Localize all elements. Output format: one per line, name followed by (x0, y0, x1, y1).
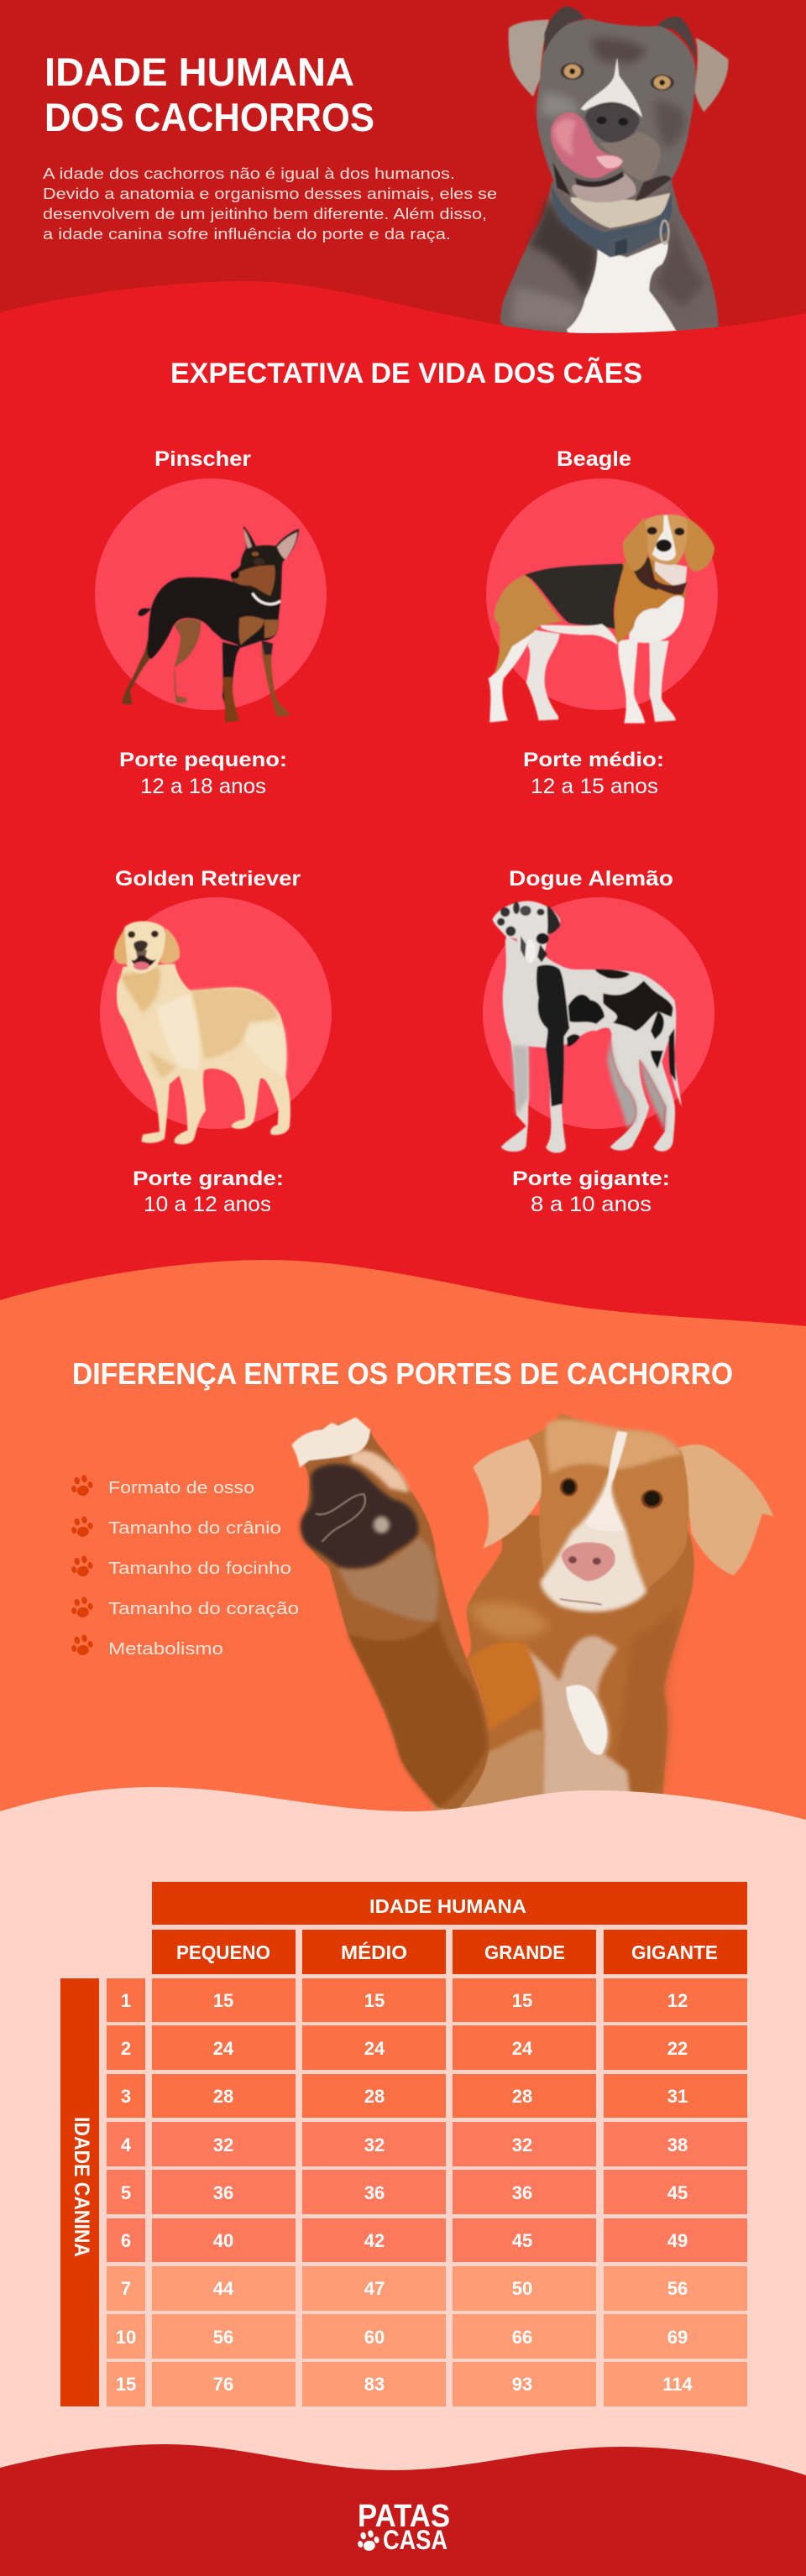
lifespan: medio: 12 a 15 anos (531, 775, 658, 798)
table row: 2: 24 (512, 2038, 533, 2059)
table row: 2: 24 (213, 2038, 234, 2059)
table: idade humana x idade canina (60, 1882, 747, 2406)
circle: golden (100, 897, 332, 1129)
icon: paw 3 (69, 1554, 95, 1578)
list item 3: Tamanho do focinho (108, 1560, 291, 1578)
panel: dogue alemao (483, 867, 714, 1216)
heading: diferenca entre os portes: DIFERENÇA ENTRE OS PORTES DE CACHORRO (72, 1356, 733, 1391)
table row: 15: 93 (512, 2374, 532, 2395)
table header: portes (152, 1930, 747, 1974)
table row: 5: 5 (121, 2182, 131, 2203)
hero intro text: A idade dos cachorros não é igual à dos humanos. (43, 165, 455, 182)
size label: gigante: Porte gigante: (512, 1168, 670, 1190)
list item 1: Formato de osso (108, 1479, 254, 1497)
table row: 2: 2 (121, 2038, 131, 2059)
table row: 6: 45 (512, 2230, 532, 2251)
breed name: golden: Golden Retriever (115, 867, 301, 891)
panel: pinscher (95, 447, 327, 798)
logo: patas da casa (355, 2499, 450, 2555)
icon: paw 2 (69, 1515, 95, 1539)
hero title (44, 50, 374, 139)
table row: 1: 15 (364, 1990, 385, 2011)
size label: grande: Porte grande: (133, 1168, 284, 1190)
icon: golden retriever dog (114, 921, 290, 1144)
hero intro text (43, 165, 497, 243)
table row: 6: 40 (213, 2230, 233, 2251)
hero title: IDADE HUMANA (44, 50, 354, 94)
table row: 5 (107, 2170, 747, 2214)
table row: 7 (107, 2266, 747, 2311)
table header: portes: MÉDIO (341, 1941, 407, 1963)
panel: golden retriever (100, 867, 332, 1216)
table row: 2: 24 (364, 2038, 385, 2059)
size label: pequeno: Porte pequeno: (119, 749, 287, 771)
panel: bright red section background (0, 281, 806, 1343)
table row: 10: 66 (512, 2327, 532, 2348)
table row: 6 (107, 2218, 747, 2262)
icon: paw 5 (69, 1633, 95, 1657)
panel: peach section background (0, 1787, 806, 2518)
table row: 1: 1 (121, 1990, 131, 2011)
table row: 7: 50 (512, 2278, 532, 2299)
table row: 2 (107, 2025, 747, 2070)
table row: 3: 31 (667, 2086, 688, 2107)
lifespan: pequeno: 12 a 18 anos (140, 775, 266, 798)
icon: paw 4 (69, 1596, 95, 1619)
breed name: pinscher: Pinscher (154, 447, 251, 471)
list item 2: Tamanho do crânio (108, 1519, 281, 1538)
breed name: dogue: Dogue Alemão (509, 867, 673, 891)
table header: portes: GRANDE (484, 1941, 565, 1963)
table row: 5: 36 (213, 2182, 233, 2203)
logo: patas da casa: PATAS (358, 2499, 450, 2534)
table header: idade humana (152, 1882, 747, 1925)
table row: 15 (107, 2362, 747, 2406)
table row: 15: 83 (364, 2374, 385, 2395)
background: hero dark red (0, 0, 806, 353)
table row: 4: 4 (121, 2134, 132, 2155)
table row: 3 (107, 2074, 747, 2118)
list item 4: Tamanho do coração (108, 1600, 299, 1618)
table row: 10 (107, 2314, 747, 2359)
icon: beagle dog (489, 515, 714, 724)
circle: beagle (486, 478, 718, 710)
hero intro text: a idade canina sofre influência do porte e da raça. (43, 225, 451, 243)
table row: 6: 6 (121, 2230, 131, 2251)
table row: 1 (107, 1978, 747, 2022)
hero intro text: desenvolvem de um jeitinho bem diferente. Além disso, (43, 205, 487, 222)
table row: 4: 32 (512, 2134, 532, 2155)
table row: 3: 28 (512, 2086, 532, 2107)
panel: footer (0, 2444, 806, 2576)
panel: beagle (486, 447, 718, 798)
table header: idade humana: IDADE HUMANA (369, 1895, 526, 1917)
table row: 15: 15 (116, 2374, 136, 2395)
table row: 4: 38 (667, 2134, 688, 2155)
table row: 1: 15 (213, 1990, 233, 2011)
table row: 6: 42 (364, 2230, 385, 2251)
table row: 6: 49 (667, 2230, 688, 2251)
size label: medio: Porte médio: (523, 749, 664, 771)
table header: portes: PEQUENO (176, 1941, 270, 1963)
icon: great dane dog (493, 901, 682, 1153)
circle: pinscher (95, 478, 327, 710)
icon: pinscher dog (122, 526, 299, 723)
table row: 7: 56 (667, 2278, 688, 2299)
icon: dog raising paw (291, 1413, 773, 1816)
logo: patas da casa: CASA (383, 2525, 447, 2555)
table row: 5: 36 (364, 2182, 385, 2203)
table row: 10: 10 (116, 2327, 136, 2348)
dog neck base (623, 556, 687, 609)
table row: 3: 28 (213, 2086, 233, 2107)
table row: 7: 47 (364, 2278, 385, 2299)
side header: idade canina: IDADE CANINA (70, 2117, 93, 2257)
bullet list: diferencas (69, 1474, 299, 1659)
table row: 10: 69 (667, 2327, 688, 2348)
panel: orange section background (0, 1260, 806, 1847)
table header: portes: GIGANTE (631, 1941, 718, 1963)
icon: hero pitbull dog (500, 6, 728, 338)
table row: 7: 7 (121, 2278, 131, 2299)
lifespan: grande: 10 a 12 anos (144, 1193, 271, 1216)
side header: idade canina (60, 1978, 99, 2406)
table row: 15: 76 (213, 2374, 233, 2395)
table row: 4: 32 (213, 2134, 233, 2155)
hero title: DOS CACHORROS (44, 95, 374, 139)
table row: 3: 28 (364, 2086, 385, 2107)
lifespan: gigante: 8 a 10 anos (531, 1193, 652, 1216)
table row: 4: 32 (364, 2134, 385, 2155)
table row: 1: 15 (512, 1990, 532, 2011)
table row: 4 (107, 2122, 747, 2166)
table row: 10: 56 (213, 2327, 233, 2348)
list item 5: Metabolismo (108, 1640, 223, 1659)
table row: 10: 60 (364, 2327, 385, 2348)
table row: 15: 114 (662, 2374, 693, 2395)
heading: expectativa de vida: EXPECTATIVA DE VIDA DOS CÃES (170, 358, 642, 389)
table row: 3: 3 (121, 2086, 131, 2107)
circle: dogue (483, 897, 714, 1129)
hero intro text: Devido a anatomia e organismo desses animais, eles se (43, 185, 497, 202)
table row: 1: 12 (667, 1990, 688, 2011)
icon: paw 1 (69, 1474, 95, 1497)
table row: 5: 45 (667, 2182, 688, 2203)
breed name: beagle: Beagle (557, 447, 631, 471)
table row: 5: 36 (512, 2182, 532, 2203)
table row: 7: 44 (213, 2278, 234, 2299)
table row: 2: 22 (667, 2038, 688, 2059)
